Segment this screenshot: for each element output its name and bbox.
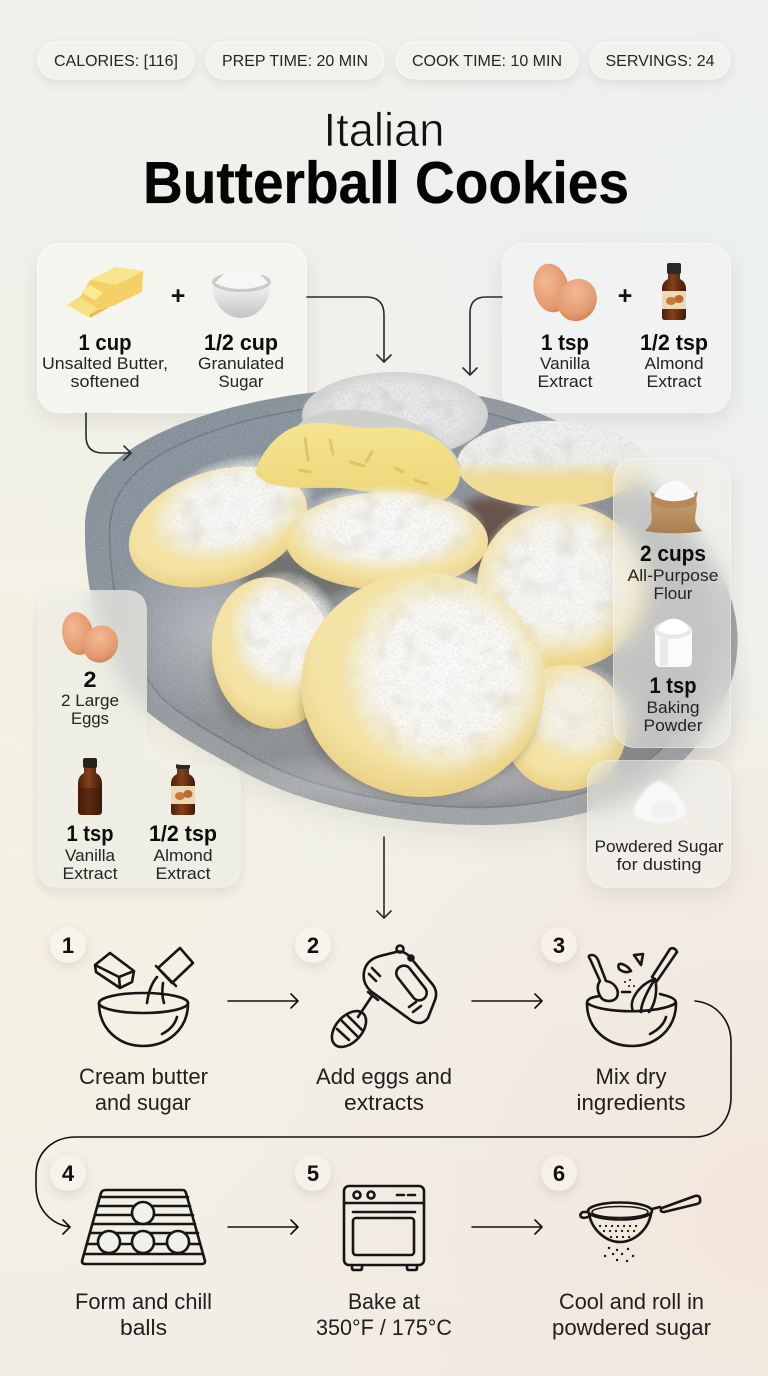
icon: hand mixer <box>325 946 436 1053</box>
label: Cool and roll in <box>559 1289 704 1314</box>
label <box>552 1289 711 1340</box>
step 1: cream butter and sugar <box>50 927 208 1115</box>
plate <box>85 388 738 825</box>
ingredient: flour: 2 cups <box>640 541 706 566</box>
stat pill: calories <box>38 42 194 79</box>
arrow: step 2 to 3 <box>472 994 542 1008</box>
cookie: lower right <box>503 662 632 791</box>
stat pill: prep time: PREP TIME: 20 MIN <box>222 53 368 70</box>
stat pill: cook time: COOK TIME: 10 MIN <box>412 53 562 70</box>
panel: eggs and extracts <box>37 590 241 888</box>
ingredient: almond <box>640 330 708 391</box>
stat pill: calories: CALORIES: [116] <box>54 53 178 70</box>
badge 5 <box>295 1155 331 1191</box>
title <box>143 103 629 216</box>
cookie: lower left <box>202 563 349 737</box>
ingredient: vanilla: Extract <box>538 372 593 391</box>
panel: flour and baking powder <box>613 458 731 748</box>
ingredient: flour <box>628 541 718 603</box>
cookie: right top <box>457 421 645 507</box>
label: balls <box>120 1315 167 1340</box>
title: Italian <box>324 103 444 156</box>
badge 1: 1 <box>62 933 74 958</box>
badge 4 <box>50 1155 86 1191</box>
icon: baking powder jar <box>654 619 692 667</box>
icon: vanilla bottle <box>78 758 102 815</box>
stat pill: servings: SERVINGS: 24 <box>606 53 715 70</box>
ingredient: almond: 1/2 tsp <box>149 821 217 846</box>
ingredient: butter: softened <box>70 372 140 391</box>
label: ingredients <box>576 1090 686 1115</box>
icon: bowl with spoon and whisk <box>587 948 677 1046</box>
ingredient: baking powder <box>644 673 703 735</box>
panel: butter and sugar <box>37 243 307 413</box>
step 4: form and chill balls <box>50 1155 212 1340</box>
ingredient: vanilla <box>538 330 593 391</box>
badge 3 <box>541 927 577 963</box>
badge 3: 3 <box>553 933 565 958</box>
ingredient: sugar: 1/2 cup <box>204 330 278 355</box>
badge 6: 6 <box>553 1161 565 1186</box>
ingredient: butter: Unsalted Butter, <box>42 354 168 373</box>
cookie: middle <box>286 484 488 590</box>
ingredient: vanilla: Vanilla <box>65 846 116 865</box>
ingredient: vanilla: 1 tsp <box>541 330 589 355</box>
plus sign: + <box>171 282 185 310</box>
cookie: big front <box>301 568 551 798</box>
arrow: step 5 to 6 <box>472 1220 542 1234</box>
ingredient: vanilla: Vanilla <box>540 354 591 373</box>
badge 2 <box>295 927 331 963</box>
icon: baking tray with balls <box>82 1190 205 1264</box>
ingredient: almond: Extract <box>646 372 702 391</box>
badge 6 <box>541 1155 577 1191</box>
ingredient: sugar: Sugar <box>218 372 264 391</box>
ingredient: butter <box>42 330 168 391</box>
ingredient: baking powder: Baking <box>646 698 700 717</box>
title: Butterball Cookies <box>143 150 629 216</box>
ingredient: sugar <box>198 330 284 391</box>
stat pill: servings <box>590 42 730 79</box>
ingredient: butter: 1 cup <box>78 330 132 355</box>
label <box>75 1289 212 1340</box>
stat pill: cook time <box>396 42 578 79</box>
label: powdered sugar <box>552 1315 711 1340</box>
icon: oven <box>344 1186 424 1270</box>
ingredient: eggs: Eggs <box>71 709 109 728</box>
cookie: back top <box>299 369 491 461</box>
label <box>79 1064 208 1115</box>
label <box>576 1064 686 1115</box>
icon: butter pouring into bowl <box>95 948 193 1046</box>
panel: vanilla and almond extract <box>502 243 731 413</box>
step 2: add eggs and extracts <box>295 927 452 1115</box>
label: Mix dry <box>596 1064 666 1089</box>
ingredient: vanilla: Extract <box>62 864 118 883</box>
label <box>316 1064 452 1115</box>
arrow: step 1 to 2 <box>228 994 298 1008</box>
plate shadow <box>86 444 754 876</box>
arrow: plate to steps <box>377 837 391 918</box>
arrow: butter panel to plate <box>307 297 391 362</box>
ingredient: flour: Flour <box>654 584 693 603</box>
cookie: right large <box>476 498 647 670</box>
ingredient: almond: Almond <box>644 354 704 373</box>
label: Add eggs and <box>316 1064 452 1089</box>
ingredient: eggs: 2 <box>84 667 96 692</box>
arrow: step 3 around to step 4 <box>36 1001 731 1234</box>
label <box>316 1289 452 1340</box>
icon: sieve <box>580 1196 700 1261</box>
label: extracts <box>344 1090 424 1115</box>
ingredient: eggs: 2 Large <box>61 691 119 710</box>
ingredient: powdered sugar: for dusting <box>616 855 702 874</box>
badge 1 <box>50 927 86 963</box>
icon: almond extract bottle <box>662 263 686 320</box>
label: and sugar <box>95 1090 191 1115</box>
ingredient: sugar: Granulated <box>198 354 284 373</box>
step 3: mix dry ingredients <box>541 927 686 1115</box>
ingredient: powdered sugar: Powdered Sugar <box>594 837 724 856</box>
icon: eggs <box>62 612 118 663</box>
ingredient: almond: Extract <box>156 864 211 883</box>
ingredient: almond: 1/2 tsp <box>640 330 708 355</box>
ingredient: powdered sugar <box>594 837 724 874</box>
label: Bake at <box>348 1289 420 1314</box>
icon: eggs <box>530 261 604 328</box>
label: 350°F / 175°C <box>316 1315 452 1340</box>
arrow: eggs panel to plate <box>463 297 502 375</box>
step 5: bake <box>295 1155 452 1340</box>
ingredient: vanilla <box>64 826 118 879</box>
plus sign: + <box>618 282 632 310</box>
stat pill: prep time <box>206 42 384 79</box>
step 6: cool and roll <box>541 1155 711 1340</box>
badge 5: 5 <box>307 1161 319 1186</box>
ingredient: baking powder: Powder <box>644 716 703 735</box>
cookie: left <box>113 434 329 609</box>
badge 4: 4 <box>62 1161 75 1186</box>
panel: powdered sugar <box>587 760 731 888</box>
icon: powdered sugar pile <box>633 781 686 822</box>
ingredient: almond: Almond <box>154 846 212 865</box>
ingredient: flour: All-Purpose <box>628 566 718 585</box>
ingredient: vanilla: 1 tsp <box>66 821 114 846</box>
label: Form and chill <box>75 1289 212 1314</box>
ingredient: almond <box>150 825 216 879</box>
label: Cream butter <box>79 1064 208 1089</box>
arrow: butter panel down to plate <box>86 413 131 460</box>
ingredient: baking powder: 1 tsp <box>650 673 696 698</box>
icon: butter stick <box>67 267 143 318</box>
arrow: step 4 to 5 <box>228 1220 298 1234</box>
icon: sugar bowl <box>212 267 271 318</box>
badge 2: 2 <box>307 933 319 958</box>
ingredient: eggs <box>61 667 119 728</box>
icon: flour sack <box>645 481 702 533</box>
icon: almond bottle <box>171 764 195 815</box>
shadows between cookies <box>240 497 535 600</box>
shadow of eggs panel <box>37 596 241 894</box>
cookie: broken half showing crumb <box>255 410 462 503</box>
